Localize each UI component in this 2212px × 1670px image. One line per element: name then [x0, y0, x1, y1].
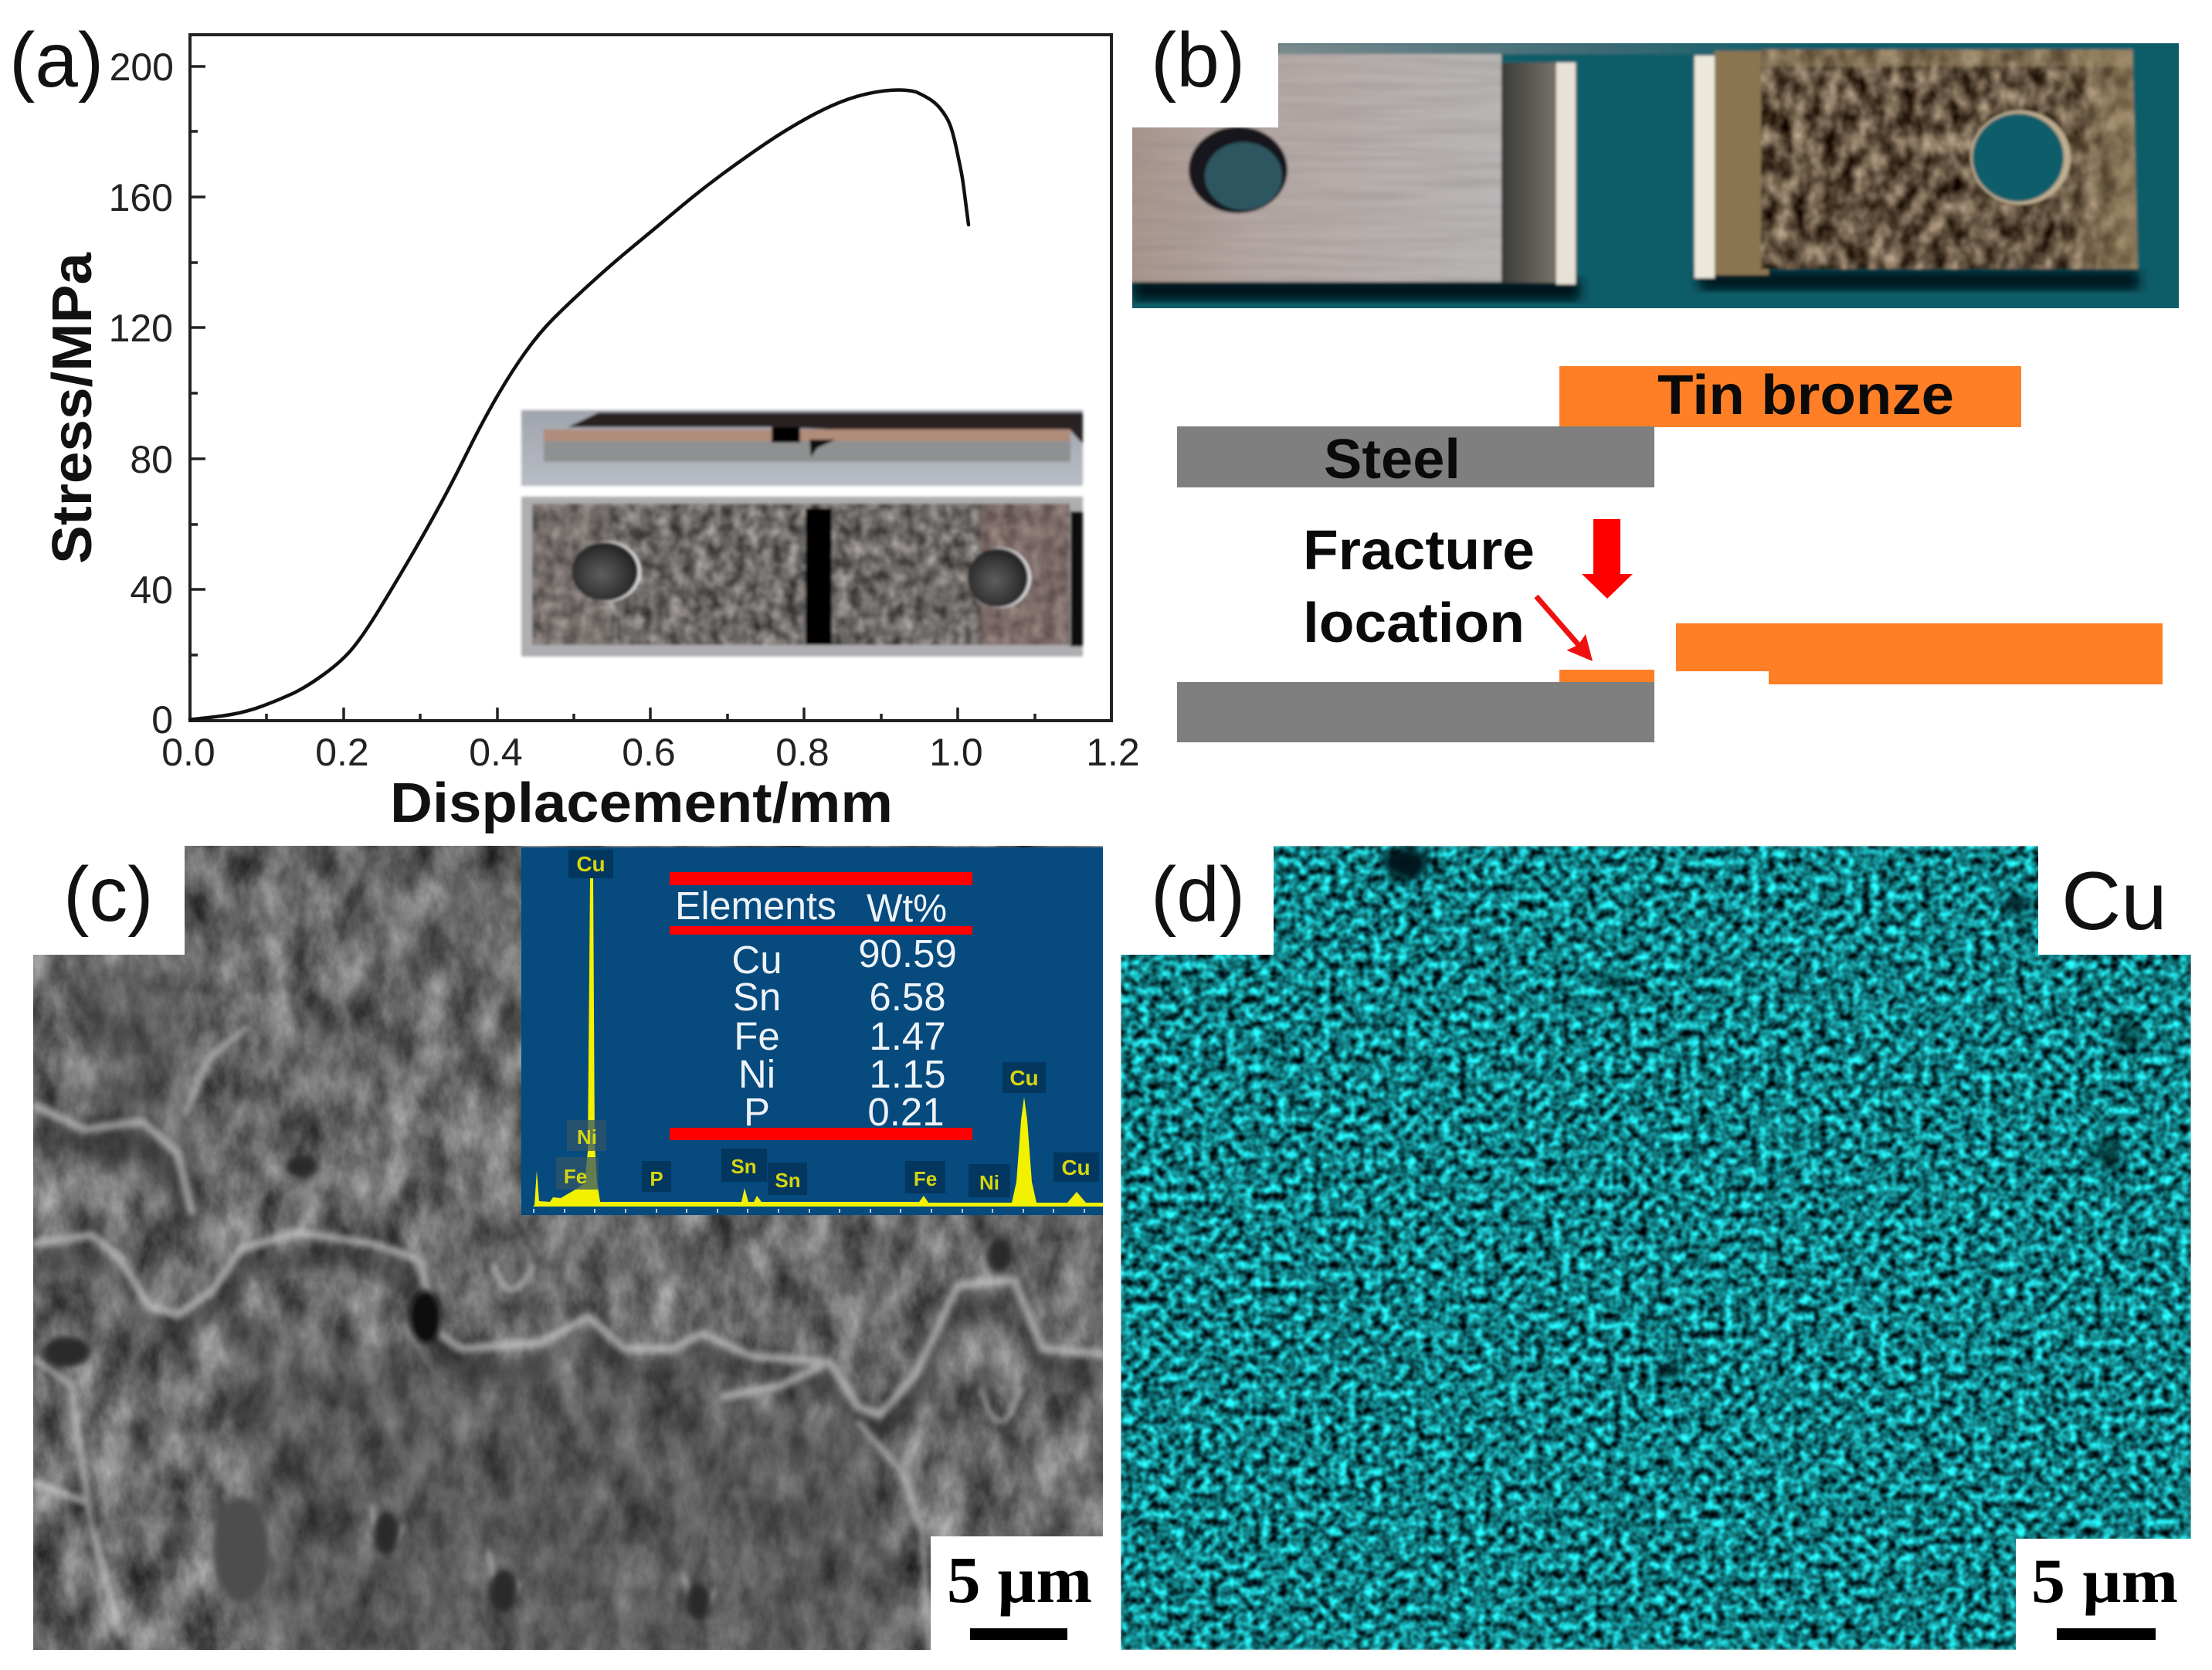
composition table: Elements	[675, 884, 836, 928]
peak labels: Cu	[1061, 1156, 1091, 1180]
x axis tick labels: 0.6	[622, 731, 676, 774]
scale bar: 5 µm	[2031, 1546, 2178, 1640]
panel: (c) fracture surface SEM image	[33, 846, 1103, 1650]
x axis tick labels: 0.8	[775, 731, 830, 774]
peak labels	[556, 850, 1099, 1197]
composition table: Wt%	[867, 886, 947, 930]
panel label (d): (d)	[1151, 851, 1245, 938]
peak labels: Sn	[731, 1155, 757, 1178]
y axis tick labels: 160	[109, 176, 173, 219]
y axis title: Stress/MPa	[42, 252, 103, 564]
composition table: 1.47	[869, 1014, 946, 1058]
x axis tick labels	[161, 731, 1140, 774]
panel label (a): (a)	[9, 17, 103, 104]
peak labels: Ni	[577, 1125, 597, 1149]
plot frame	[190, 35, 1111, 721]
arrow: fracture location pointer	[1534, 595, 1593, 661]
peak labels: Sn	[775, 1169, 801, 1192]
peak labels: Cu	[1009, 1066, 1039, 1090]
tin bronze bar	[1559, 366, 2021, 427]
composition table: Cu	[731, 938, 782, 982]
x axis tick labels: 1.0	[929, 731, 983, 774]
peak labels: Ni	[979, 1171, 999, 1194]
inset photo: specimen side view	[521, 410, 1083, 486]
y axis tick labels: 40	[130, 569, 173, 612]
x axis tick labels: 0.2	[315, 731, 369, 774]
panel: (b) fracture location schematic	[1177, 365, 2163, 742]
panel label (b): (b)	[1151, 17, 1245, 104]
residual bronze layer on steel	[1559, 670, 1654, 686]
x axis tick labels: 0.4	[469, 731, 523, 774]
composition table	[670, 872, 972, 1140]
stress curve	[190, 90, 969, 720]
steel half of the specimen	[1120, 54, 1576, 284]
scale bar: 5 µm: 5 µm	[947, 1543, 1092, 1617]
composition table: P	[744, 1090, 770, 1134]
panel: (d) Cu elemental map	[1121, 846, 2191, 1650]
energy axis ticks	[534, 1209, 1084, 1213]
y axis tick labels: 0	[151, 698, 173, 742]
composition table: 1.15	[869, 1052, 946, 1096]
arrow: thick red down arrow	[1582, 519, 1633, 599]
SEM micrograph	[33, 846, 1103, 1650]
composition table: 6.58	[869, 975, 946, 1019]
peak labels: Fe	[914, 1167, 937, 1190]
cyan EDS map	[1121, 846, 2191, 1650]
panel label (c): (c)	[63, 851, 154, 938]
label: tin bronze: Tin bronze	[1657, 365, 1954, 426]
peak labels: Cu	[576, 852, 606, 876]
composition table: 0.21	[867, 1090, 945, 1134]
inset: EDS spectrum and composition table	[521, 847, 1103, 1215]
scale bar: 5 µm: 5 µm	[2031, 1546, 2178, 1616]
label: steel: Steel	[1324, 429, 1461, 490]
spectrum peaks	[533, 877, 1103, 1207]
composition table: 90.59	[858, 932, 957, 976]
label: fracture location: Fracture	[1303, 520, 1535, 582]
steel bar	[1177, 426, 1654, 487]
axis ticks	[190, 66, 1035, 721]
peak labels: Fe	[564, 1165, 587, 1188]
composition table: Ni	[738, 1052, 775, 1096]
lower steel bar	[1177, 682, 1654, 742]
y axis tick labels: 80	[130, 438, 173, 481]
separated bronze bar	[1676, 623, 2163, 684]
x axis title: Displacement/mm	[390, 772, 893, 834]
photo background	[1120, 39, 2186, 313]
label: fracture location: location	[1303, 592, 1525, 654]
peak labels: P	[650, 1167, 663, 1190]
composition table: Fe	[734, 1014, 780, 1058]
composition table: Sn	[733, 975, 781, 1019]
y axis tick labels: 200	[110, 46, 174, 89]
x axis tick labels: 0.0	[161, 731, 215, 774]
inset photo: specimen face view	[521, 497, 1083, 657]
y axis tick labels	[109, 46, 174, 742]
y axis tick labels: 120	[109, 307, 173, 350]
panel: (b) fractured specimen photo	[1120, 17, 2186, 313]
panel: (a) stress-displacement chart	[9, 17, 1140, 834]
x axis tick labels: 1.2	[1086, 731, 1140, 774]
bronze half of the specimen	[1695, 49, 2139, 278]
element label Cu: Cu	[2061, 854, 2167, 947]
